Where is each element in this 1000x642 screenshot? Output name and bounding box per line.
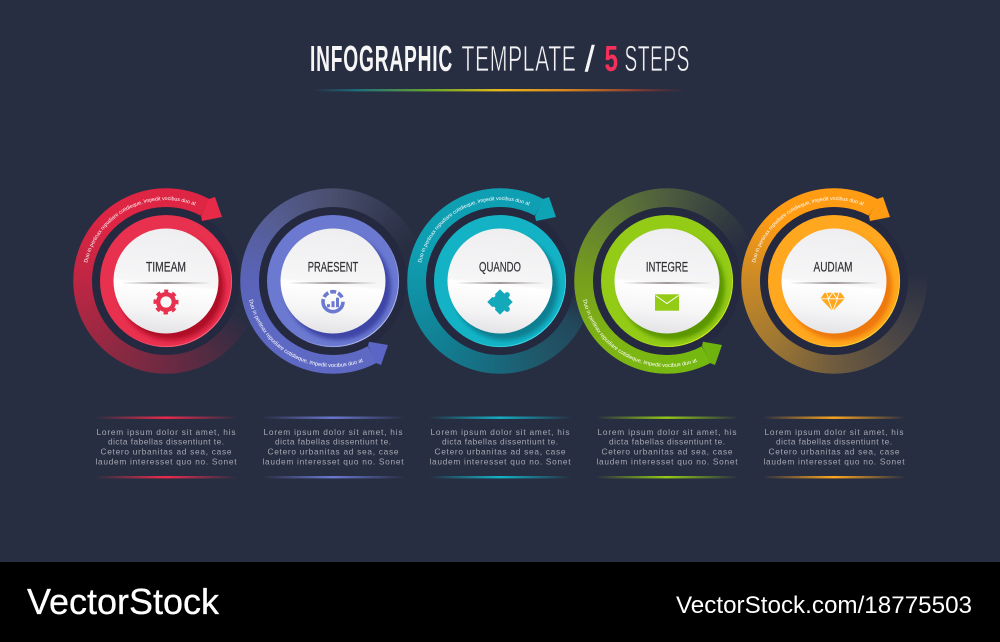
icon: donut chart [323,292,343,312]
step 5: AUDIAM: Duo in pertinax repudiare cotidieque, impedit vocibus duo at [752,196,864,262]
text block: step 5: Lorem ipsum dolor sit amet, his [764,427,904,437]
step 4: INTEGRE [574,188,738,374]
step 1: TIMEAM: TIMEAM [146,259,186,275]
icon: envelope [655,294,679,311]
text block: step 2: dicta fabellas dissentiunt te. [275,437,391,447]
arrowhead [535,197,556,221]
step 3: QUANDO: QUANDO [479,259,521,275]
step 2: PRAESENT: PRAESENT [308,259,359,275]
arrowhead [201,197,222,221]
text block: step 1: Lorem ipsum dolor sit amet, his [96,427,236,437]
step 1: TIMEAM: Duo in pertinax repudiare cotidieque, impedit vocibus duo at [84,196,196,262]
text block: step 4: laudem interesset quo no. Sonet [596,456,738,466]
text block: step 4: Lorem ipsum dolor sit amet, his [598,427,736,437]
arrowhead [368,342,388,365]
text block: step 1 [95,416,237,478]
title: TEMPLATE [462,38,576,79]
arrowhead [868,197,890,221]
text block: step 5 [763,416,905,478]
title: STEPS [624,38,690,79]
text block: step 1: Cetero urbanitas ad sea, case [100,447,232,457]
step 3: QUANDO [407,188,584,374]
footer bar: VectorStock [27,581,220,622]
text block: step 4: dicta fabellas dissentiunt te. [609,437,725,447]
text block: step 4 [596,416,738,478]
text block: step 2: Lorem ipsum dolor sit amet, his [264,427,402,437]
text block: step 3 [429,416,571,478]
step 5: AUDIAM: AUDIAM [813,259,852,275]
text block: step 1: dicta fabellas dissentiunt te. [108,437,224,447]
text block: step 3: Cetero urbanitas ad sea, case [434,447,566,457]
text block: step 3: Lorem ipsum dolor sit amet, his [430,427,570,437]
step 1: TIMEAM [73,188,244,374]
step 4: INTEGRE: Duo in pertinax repudiare cotidieque, impedit vocibus duo at [583,299,698,368]
text block: step 1: laudem interesset quo no. Sonet [96,456,237,466]
icon: gear [155,291,177,313]
icon: diamond [820,292,844,311]
arrowhead [702,342,722,365]
text block: step 5: dicta fabellas dissentiunt te. [776,437,892,447]
title: / [585,38,594,79]
title: INFOGRAPHIC [310,38,453,79]
step 4: INTEGRE: INTEGRE [646,259,688,275]
text block: step 3: dicta fabellas dissentiunt te. [442,437,558,447]
text block: step 2 [262,416,404,478]
step 2: PRAESENT [240,188,404,374]
title: 5 [604,38,618,79]
text block: step 3: laudem interesset quo no. Sonet [430,456,571,466]
title underline [313,89,685,91]
step 5: AUDIAM [741,188,926,374]
step 3: QUANDO: Duo in pertinax repudiare cotidieque, impedit vocibus duo at [418,196,530,262]
footer bar [0,562,1000,642]
step 2: PRAESENT: Duo in pertinax repudiare cotidieque, impedit vocibus duo at [249,299,364,368]
icon: puzzle piece [484,285,518,319]
text block: step 2: laudem interesset quo no. Sonet [262,456,404,466]
text block: step 4: Cetero urbanitas ad sea, case [602,447,733,457]
text block: step 2: Cetero urbanitas ad sea, case [268,447,399,457]
text block: step 5: Cetero urbanitas ad sea, case [768,447,900,457]
footer bar: VectorStock.com/18775503 [676,592,972,619]
text block: step 5: laudem interesset quo no. Sonet [764,456,905,466]
